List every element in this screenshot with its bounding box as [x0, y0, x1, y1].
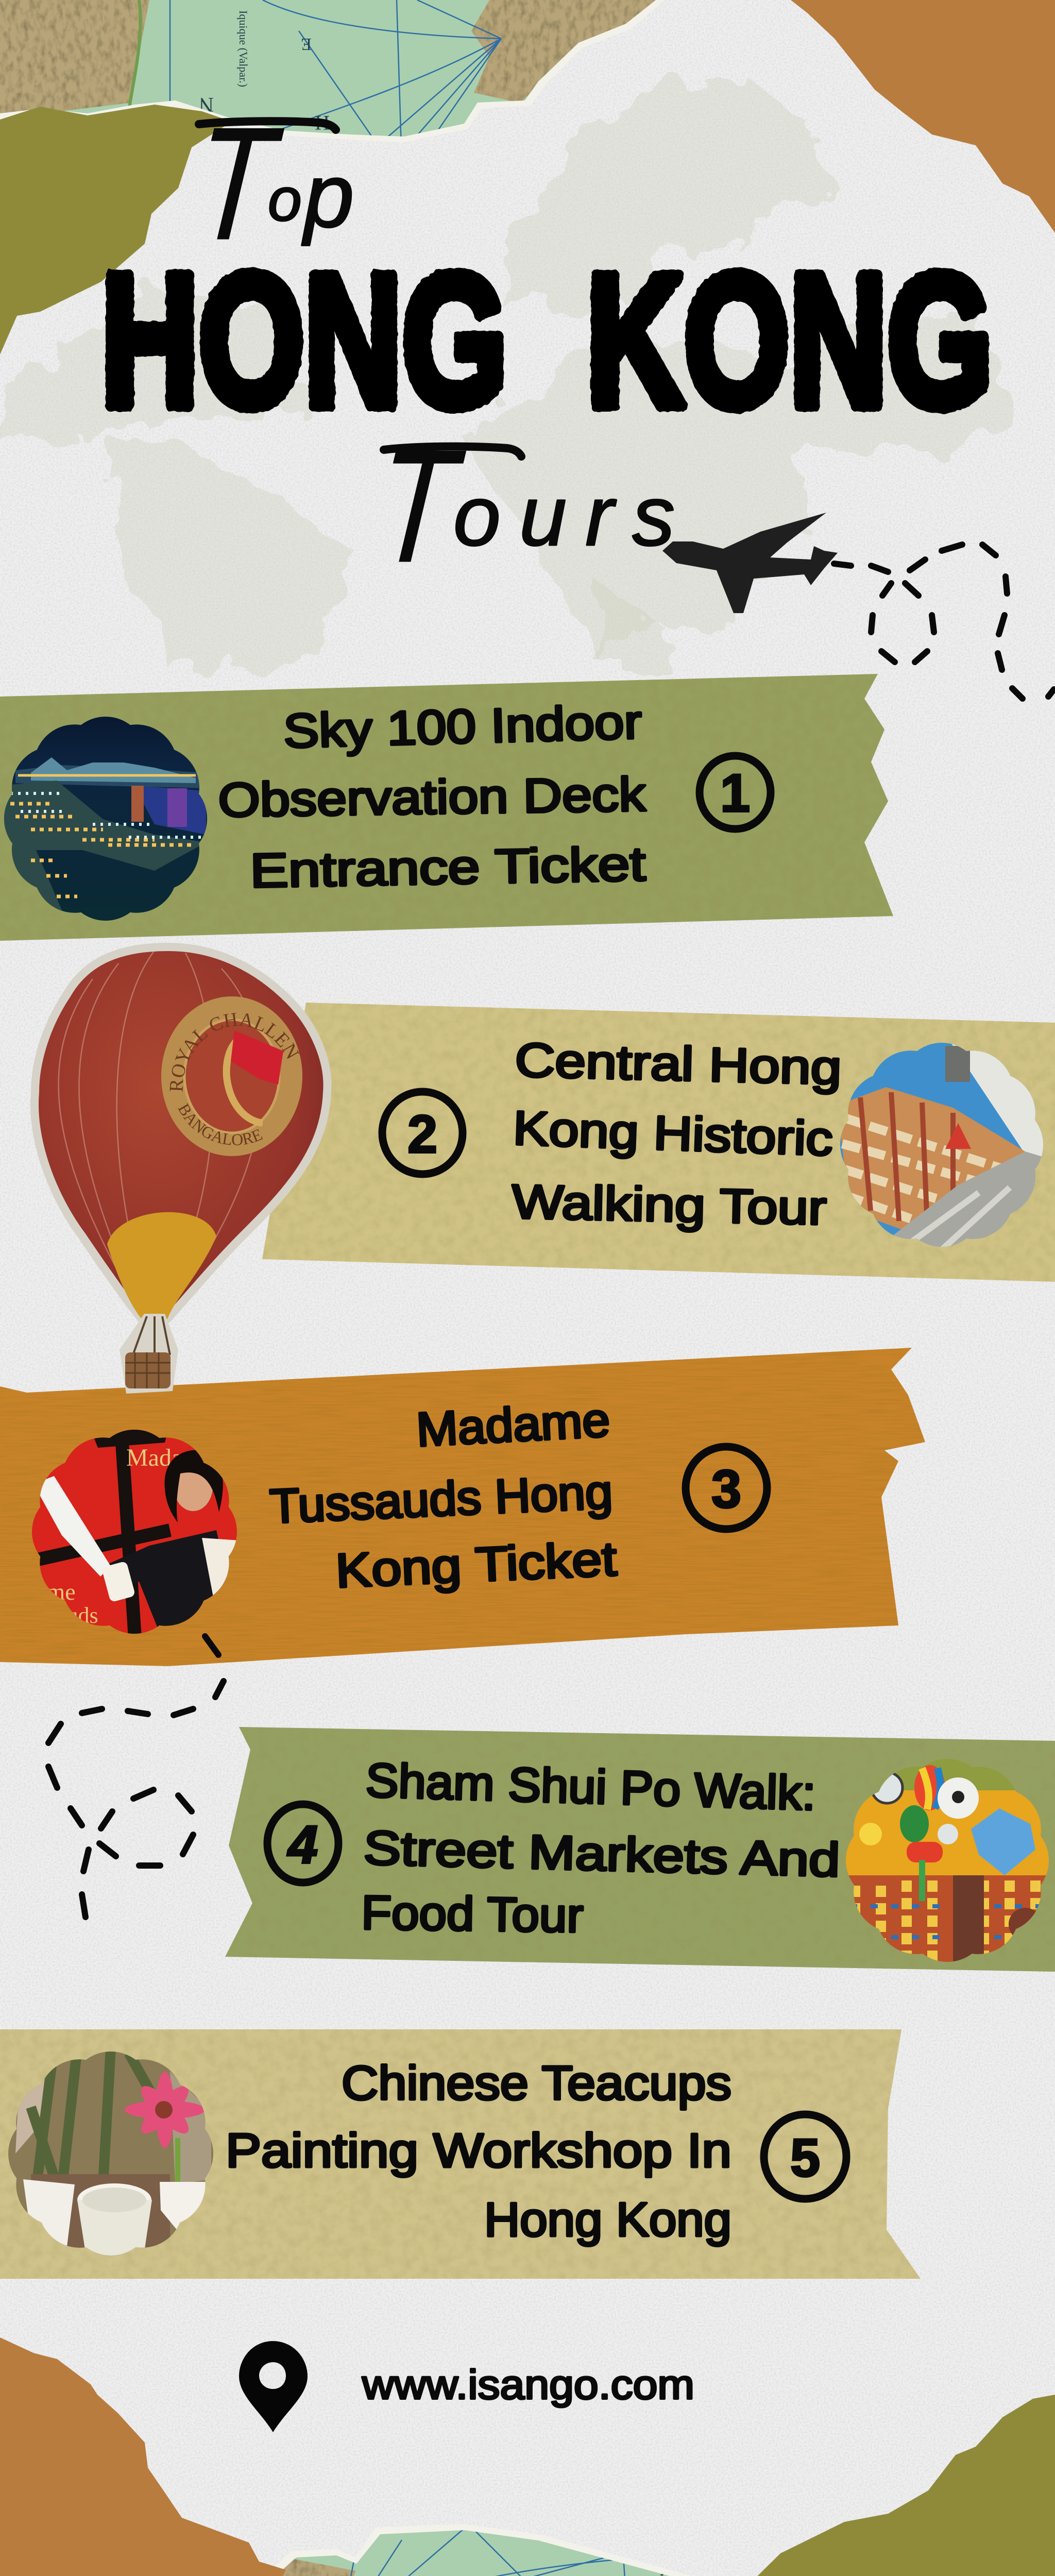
text: tour 3 name: Tussauds Hong	[268, 1465, 614, 1533]
torn map: top: N	[199, 93, 214, 116]
text: tour 4 name: Street Markets And	[363, 1821, 841, 1887]
number badge 2: 2	[407, 1105, 437, 1164]
dashed flight path: top	[834, 545, 1054, 699]
orange torn paper: top right	[791, 0, 1055, 233]
torn map: top: Iquique (Valpar.)	[237, 10, 250, 87]
title: Tours: ours	[453, 468, 675, 563]
panel: banner 3	[0, 1348, 925, 1666]
orange torn paper: bottom left	[0, 2337, 286, 2576]
text: tour 3 name: Madame	[415, 1393, 611, 1456]
icon: airplane	[662, 513, 838, 613]
text: tour 2 name	[512, 1033, 842, 1235]
photo: Hong Kong harbour at night	[0, 711, 212, 925]
number badge 5	[764, 2114, 846, 2199]
number badge 4	[267, 1804, 338, 1883]
photo: Madame Tussauds wax figure: auds	[57, 1603, 98, 1628]
text: tour 5 name: Hong Kong	[484, 2193, 731, 2246]
text: tour 1 name: Observation Deck	[218, 767, 646, 827]
text: tour 1 name: Sky 100 Indoor	[283, 695, 642, 758]
torn map: top: E	[301, 35, 312, 54]
dashed flight path: middle	[48, 1636, 224, 1917]
panel: banner 5	[0, 2029, 921, 2279]
photo: Central Hong Kong street posters	[835, 1038, 1051, 1252]
panel: banner 1	[0, 674, 893, 941]
text: website: www.isango.com	[362, 2362, 694, 2408]
photo: Sham Shui Po street market	[840, 1754, 1055, 1967]
text: tour 4 name: Food Tour	[361, 1886, 584, 1942]
number badge 3: 3	[711, 1460, 741, 1519]
number badge 1	[700, 756, 771, 829]
torn map: bottom	[124, 2524, 1055, 2576]
torn map: top: H	[315, 111, 330, 134]
panel: banner 4	[225, 1727, 1055, 1972]
illustration: hot air balloon	[0, 0, 328, 1394]
olive torn paper: top left	[0, 105, 232, 354]
title: Top	[189, 94, 354, 274]
text: tour 3 name: Kong Ticket	[334, 1532, 618, 1598]
text: tour 2 name: Central Hong	[515, 1033, 842, 1094]
text: tour 1 name: Entrance Ticket	[250, 837, 646, 897]
text: tour 2 name: Walking Tour	[512, 1175, 827, 1235]
title: Top: T	[189, 94, 287, 274]
faded world map	[0, 77, 1010, 670]
number badge 1: 1	[720, 764, 750, 823]
number badge 2	[382, 1092, 463, 1174]
text: tour 4 name: Sham Shui Po Walk:	[365, 1753, 816, 1820]
photo: teacups and flower	[3, 2045, 219, 2262]
title: Hong Kong: HONG	[101, 235, 507, 446]
balloon skirt	[107, 1212, 216, 1319]
photo: Madame Tussauds wax figure	[26, 1422, 245, 1641]
photo: Madame Tussauds wax figure: Madam	[126, 1444, 202, 1471]
title: Tours	[370, 416, 675, 596]
text: tour 1 name	[218, 695, 646, 897]
number badge 5: 5	[790, 2128, 820, 2188]
text: tour 5 name: Painting Workshop In	[226, 2124, 731, 2177]
title: Top: o	[268, 166, 302, 234]
text: tour 2 name: Kong Historic	[512, 1101, 834, 1166]
photo: Madame Tussauds wax figure: ame	[36, 1579, 76, 1605]
text: tour 5 name: Chinese Teacups	[342, 2056, 731, 2110]
balloon logo: BANGALORE	[178, 1103, 263, 1145]
balloon basket	[120, 1314, 178, 1394]
panel: banner 2	[262, 1003, 1055, 1282]
text: tour 5 name	[226, 2056, 731, 2246]
title: Top: p	[301, 146, 354, 246]
text: tour 4 name	[361, 1753, 841, 1942]
olive torn paper: bottom right	[740, 2395, 1055, 2576]
text: tour 3 name	[268, 1393, 618, 1598]
title: Tours: T	[370, 416, 469, 596]
torn map: top	[0, 0, 665, 142]
icon: location pin	[239, 2341, 308, 2432]
number badge 4: 4	[287, 1815, 318, 1875]
number badge 3	[686, 1447, 767, 1529]
title: Hong Kong	[101, 235, 993, 446]
